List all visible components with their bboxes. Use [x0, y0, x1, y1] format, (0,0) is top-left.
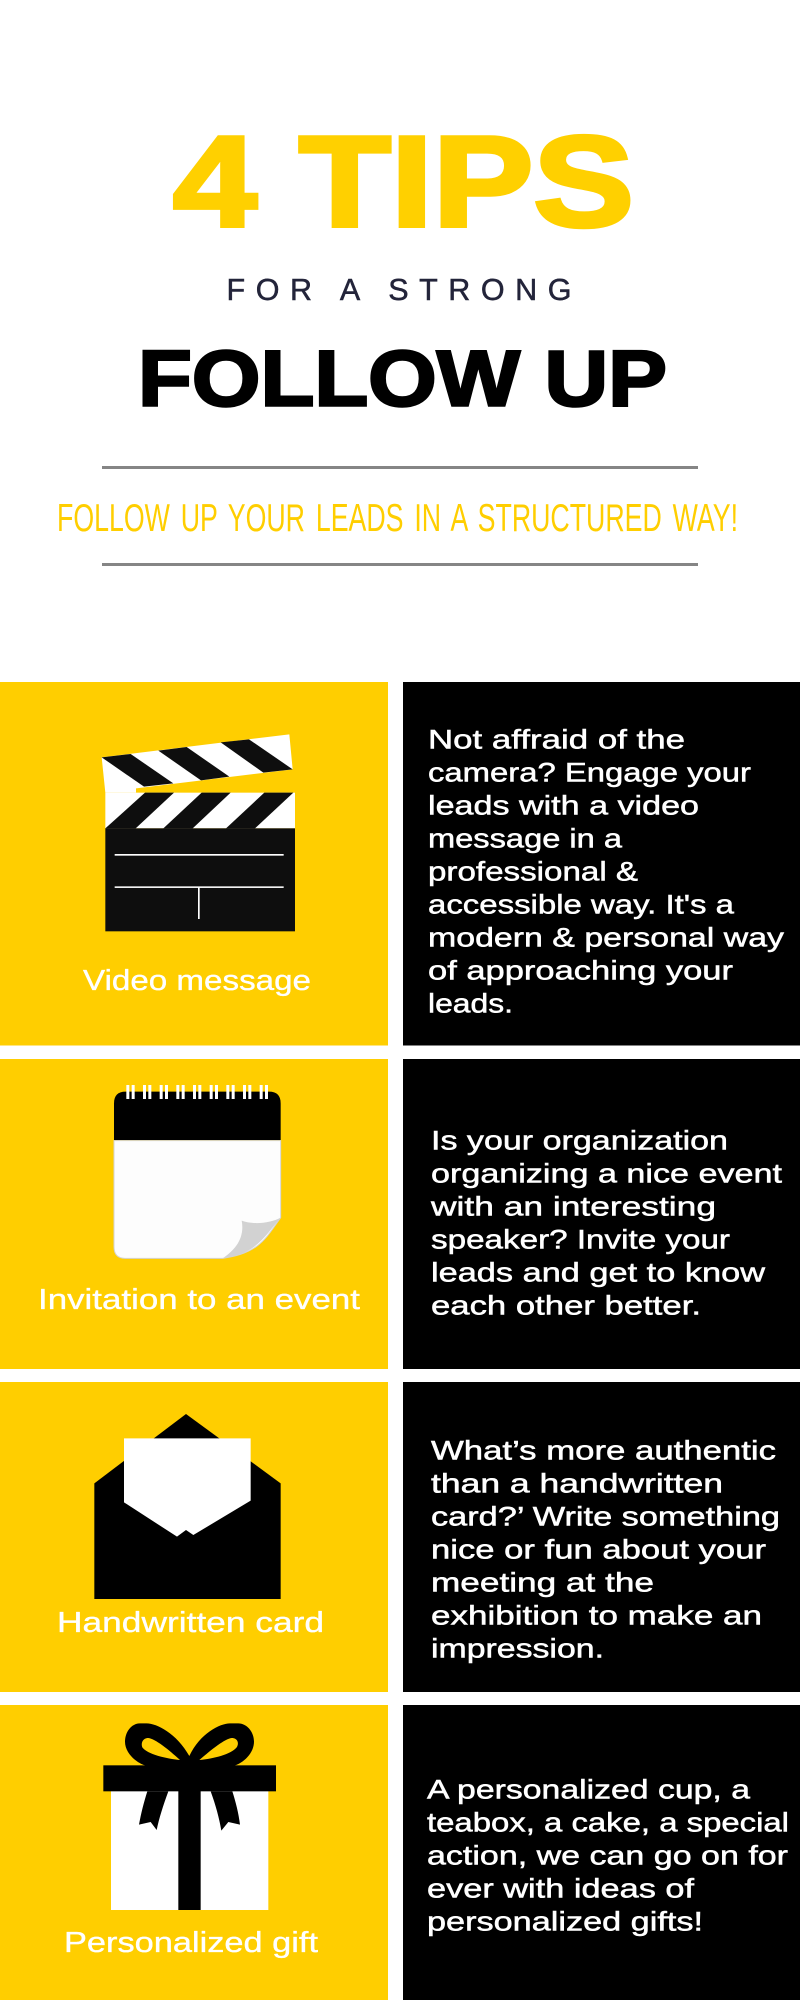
- panel: invitation description: [403, 1059, 800, 1369]
- panel: invitation description: Is your organization: [431, 1126, 728, 1156]
- panel: personalized gift description: A personalized cup, a: [427, 1775, 750, 1805]
- label: Video message: Video message: [83, 965, 311, 997]
- panel: handwritten card description: meeting at the: [431, 1568, 654, 1598]
- panel: handwritten card description: exhibition to make an: [431, 1600, 762, 1630]
- panel: video message description: message in a: [428, 824, 622, 854]
- panel: invitation description: with an interesting: [430, 1192, 716, 1222]
- panel: video message description: leads with a video: [428, 790, 699, 820]
- panel: personalized gift description: action, we can go on for: [427, 1841, 788, 1871]
- icon: gift box: [103, 1723, 276, 1910]
- label: Invitation to an event: Invitation to an event: [38, 1284, 360, 1316]
- label: Handwritten card: Handwritten card: [57, 1607, 324, 1639]
- panel: personalized gift description: teabox, a cake, a special: [427, 1808, 789, 1838]
- icon: notepad calendar: [114, 1085, 281, 1258]
- panel: video message description: of approaching your: [428, 956, 733, 986]
- panel: invitation description: each other better.: [431, 1290, 701, 1320]
- panel: video message description: modern & personal way: [428, 922, 785, 952]
- panel: handwritten card description: nice or fun about your: [431, 1534, 766, 1564]
- panel: invitation description: organizing a nice event: [431, 1159, 783, 1189]
- icon: open envelope with card: [94, 1414, 281, 1599]
- panel: video message description: leads.: [428, 988, 513, 1018]
- subtitle: FOR A STRONG: FOR A STRONG: [226, 273, 572, 307]
- heading: FOLLOW UP: FOLLOW UP: [138, 334, 667, 422]
- label: Personalized gift: Personalized gift: [64, 1927, 318, 1959]
- panel: handwritten card description: impression.: [431, 1633, 604, 1663]
- icon: clapperboard: [102, 734, 295, 931]
- panel: handwritten card description: than a handwritten: [431, 1468, 723, 1498]
- panel: video message description: [403, 682, 800, 1046]
- panel: video message description: Not affraid of the: [428, 724, 685, 754]
- panel: handwritten card description: What’s more authentic: [431, 1435, 776, 1465]
- panel: video message: [0, 682, 388, 1046]
- panel: invitation description: leads and get to know: [431, 1258, 766, 1288]
- panel: video message description: camera? Engage your: [428, 758, 751, 788]
- panel: personalized gift description: personalized gifts!: [427, 1907, 703, 1937]
- panel: video message description: accessible way. It's a: [428, 890, 734, 920]
- panel: handwritten card description: card?’ Write something: [431, 1502, 780, 1532]
- panel: handwritten card description: [403, 1382, 800, 1692]
- panel: invitation to an event: [0, 1059, 388, 1369]
- panel: personalized gift description: [403, 1705, 800, 2000]
- panel: handwritten card: [0, 1382, 388, 1692]
- panel: video message description: professional &: [428, 856, 638, 886]
- panel: personalized gift description: ever with ideas of: [427, 1874, 695, 1904]
- tagline with rules: [57, 466, 738, 566]
- title: 4 TIPS: 4 TIPS: [173, 110, 634, 254]
- panel: invitation description: speaker? Invite your: [431, 1225, 730, 1255]
- panel: personalized gift: [0, 1705, 388, 2000]
